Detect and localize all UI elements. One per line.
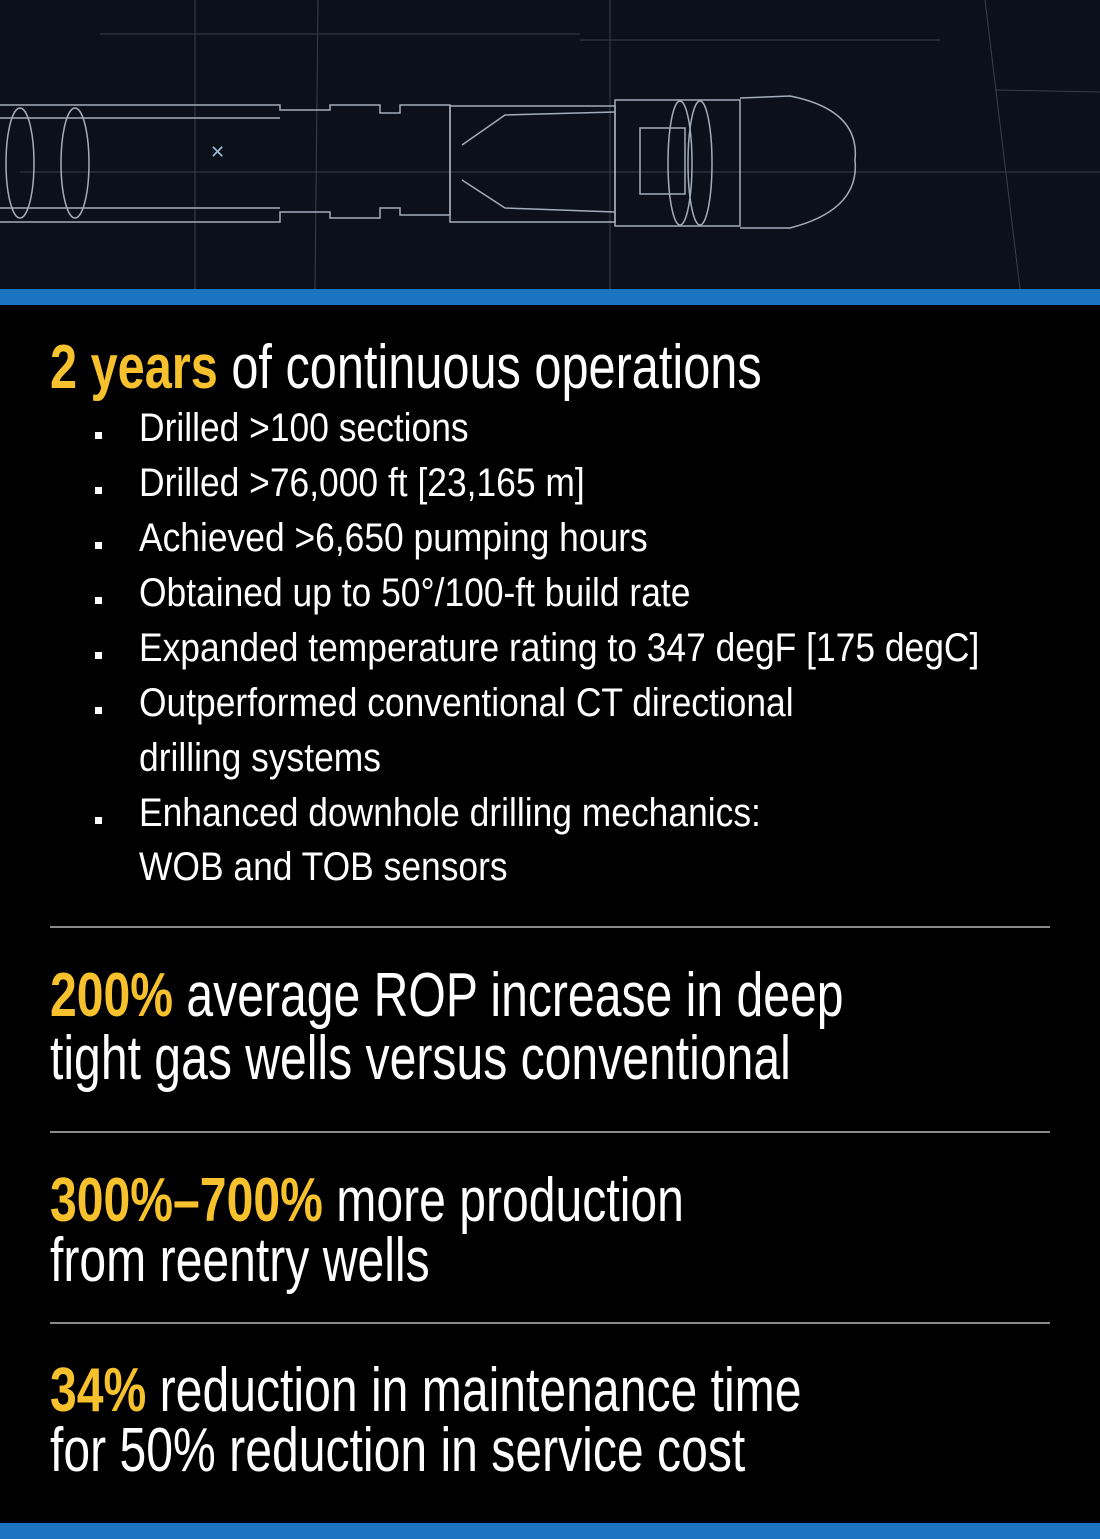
stat: 34% maintenance: 34% reduction in maintenance time xyxy=(50,1356,802,1425)
bullet list: WOB and TOB sensors xyxy=(139,845,508,889)
header image: wireframe drill tool xyxy=(0,0,1100,289)
bullet list: Drilled >76,000 ft [23,165 m] xyxy=(139,461,585,505)
header image: wireframe drill tool: ✕ xyxy=(210,142,225,162)
stat: 300-700% production xyxy=(50,1166,684,1295)
stat: 300-700% production: from reentry wells xyxy=(50,1226,430,1295)
stat: 34% maintenance: for 50% reduction in service cost xyxy=(50,1416,745,1485)
bullet list: Drilled >100 sections xyxy=(139,406,469,450)
bullet list: Outperformed conventional CT directional xyxy=(139,681,794,725)
bullet list: Achieved >6,650 pumping hours xyxy=(139,516,648,560)
stat: 200% ROP: 200% average ROP increase in deep xyxy=(50,961,843,1030)
bullet list: Enhanced downhole drilling mechanics: xyxy=(139,791,761,835)
headline: 2 years: 2 years of continuous operations xyxy=(50,333,762,402)
blue bar bottom xyxy=(0,1523,1100,1539)
stat: 300-700% production: 300%–700% more production xyxy=(50,1166,684,1235)
bullet list: Expanded temperature rating to 347 degF [175 degC] xyxy=(139,626,979,670)
stat: 34% maintenance xyxy=(50,1356,802,1485)
stat: 200% ROP xyxy=(50,961,843,1093)
blue bar top xyxy=(0,289,1100,305)
stat: 200% ROP: tight gas wells versus conventional xyxy=(50,1024,791,1093)
bullet list: Obtained up to 50°/100-ft build rate xyxy=(139,571,690,615)
bullet list: drilling systems xyxy=(139,736,381,780)
bullet list xyxy=(95,406,979,889)
